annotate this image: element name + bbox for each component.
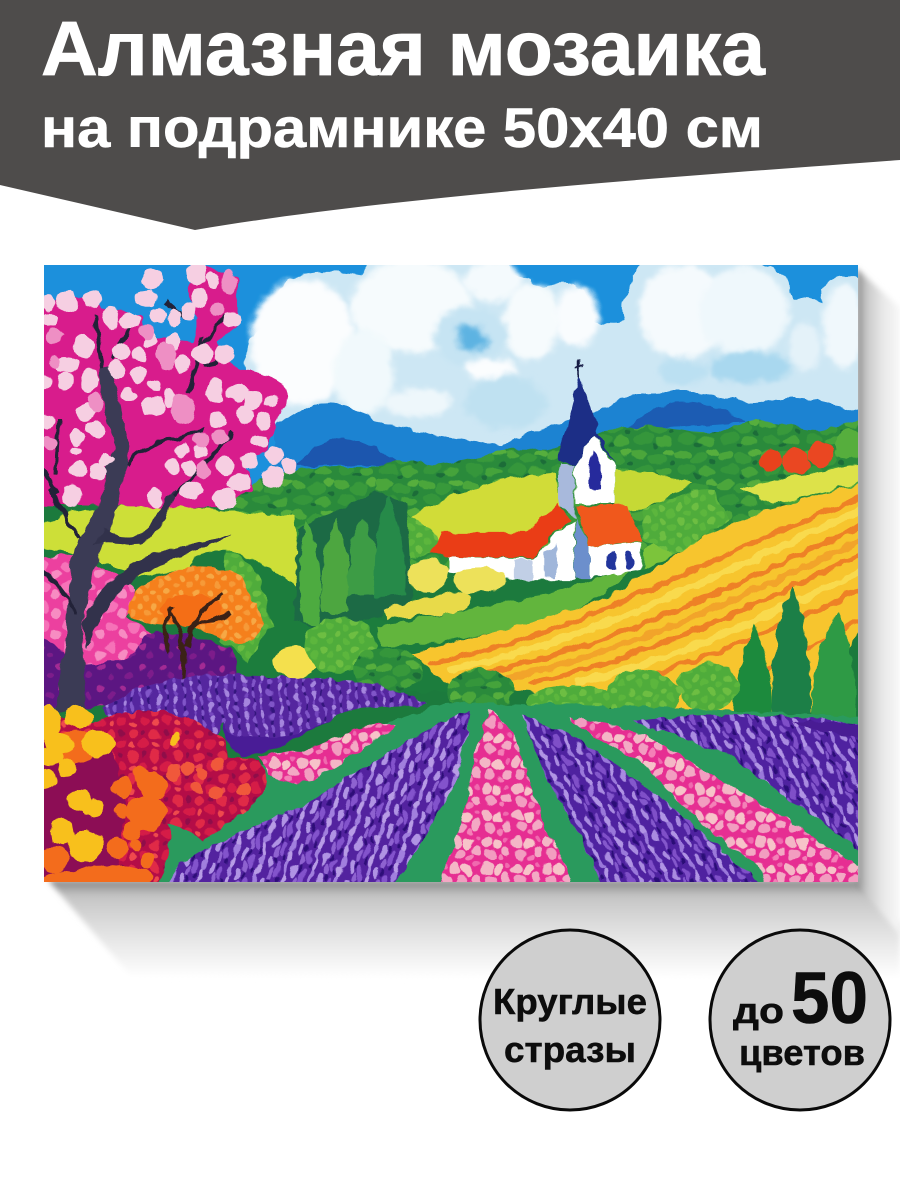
cross	[576, 359, 584, 377]
tower window	[589, 451, 601, 489]
badge: round rhinestones	[480, 930, 660, 1110]
front lavender rows	[167, 709, 761, 886]
painting base	[44, 504, 858, 765]
spire	[556, 374, 615, 463]
subtitle: на подрамнике 50х40 см	[41, 96, 763, 159]
orange blossoms	[39, 730, 167, 889]
green row base	[158, 702, 858, 882]
transept wall	[590, 543, 641, 578]
tower side	[558, 463, 574, 517]
painting: countryside landscape	[35, 260, 864, 889]
orange tree	[127, 567, 263, 678]
left purple and pink background shrubs	[38, 555, 237, 707]
medium pink petals	[43, 269, 236, 479]
badge: round rhinestones: Круглые	[493, 981, 647, 1022]
trunk	[56, 367, 130, 712]
transept red roof	[575, 505, 643, 547]
pink flower rows	[258, 710, 864, 886]
nave red roof	[429, 503, 570, 558]
back lavender rows	[102, 675, 864, 854]
small branches	[38, 301, 234, 613]
lower branches	[82, 532, 231, 651]
salmon blossoms	[166, 759, 250, 799]
title: Алмазная мозаика	[41, 6, 766, 92]
clouds	[245, 260, 864, 445]
yellow blossoms	[35, 705, 181, 862]
blossom tree	[37, 261, 296, 712]
long nave wall	[447, 519, 575, 580]
yellow-green meadows	[38, 463, 864, 590]
church	[429, 359, 643, 580]
badge: up to 50 colours: 50	[791, 958, 868, 1039]
red bushes on far hill	[760, 429, 864, 475]
blossom mass	[38, 266, 288, 507]
yellow bushes	[273, 558, 504, 677]
round green shrubs	[305, 617, 739, 718]
mountains	[274, 393, 864, 479]
tower front	[575, 435, 615, 504]
badge: up to 50 colours: цветов	[739, 1032, 865, 1073]
badge: round rhinestones: стразы	[504, 1029, 636, 1070]
canvas shadow	[48, 268, 900, 980]
pale petals	[37, 261, 296, 509]
golden wheat field	[411, 483, 864, 722]
badge: up to 50 colours: до	[733, 990, 784, 1031]
mid green land	[219, 489, 730, 664]
cypress trees	[295, 489, 864, 724]
foreground red and orange flowers	[35, 705, 268, 889]
badge: up to 50 colours	[710, 930, 890, 1110]
shaded strip	[575, 516, 590, 578]
transept windows	[607, 553, 616, 570]
sky	[44, 265, 858, 486]
header banner	[0, 0, 900, 230]
far green hills	[227, 420, 864, 570]
